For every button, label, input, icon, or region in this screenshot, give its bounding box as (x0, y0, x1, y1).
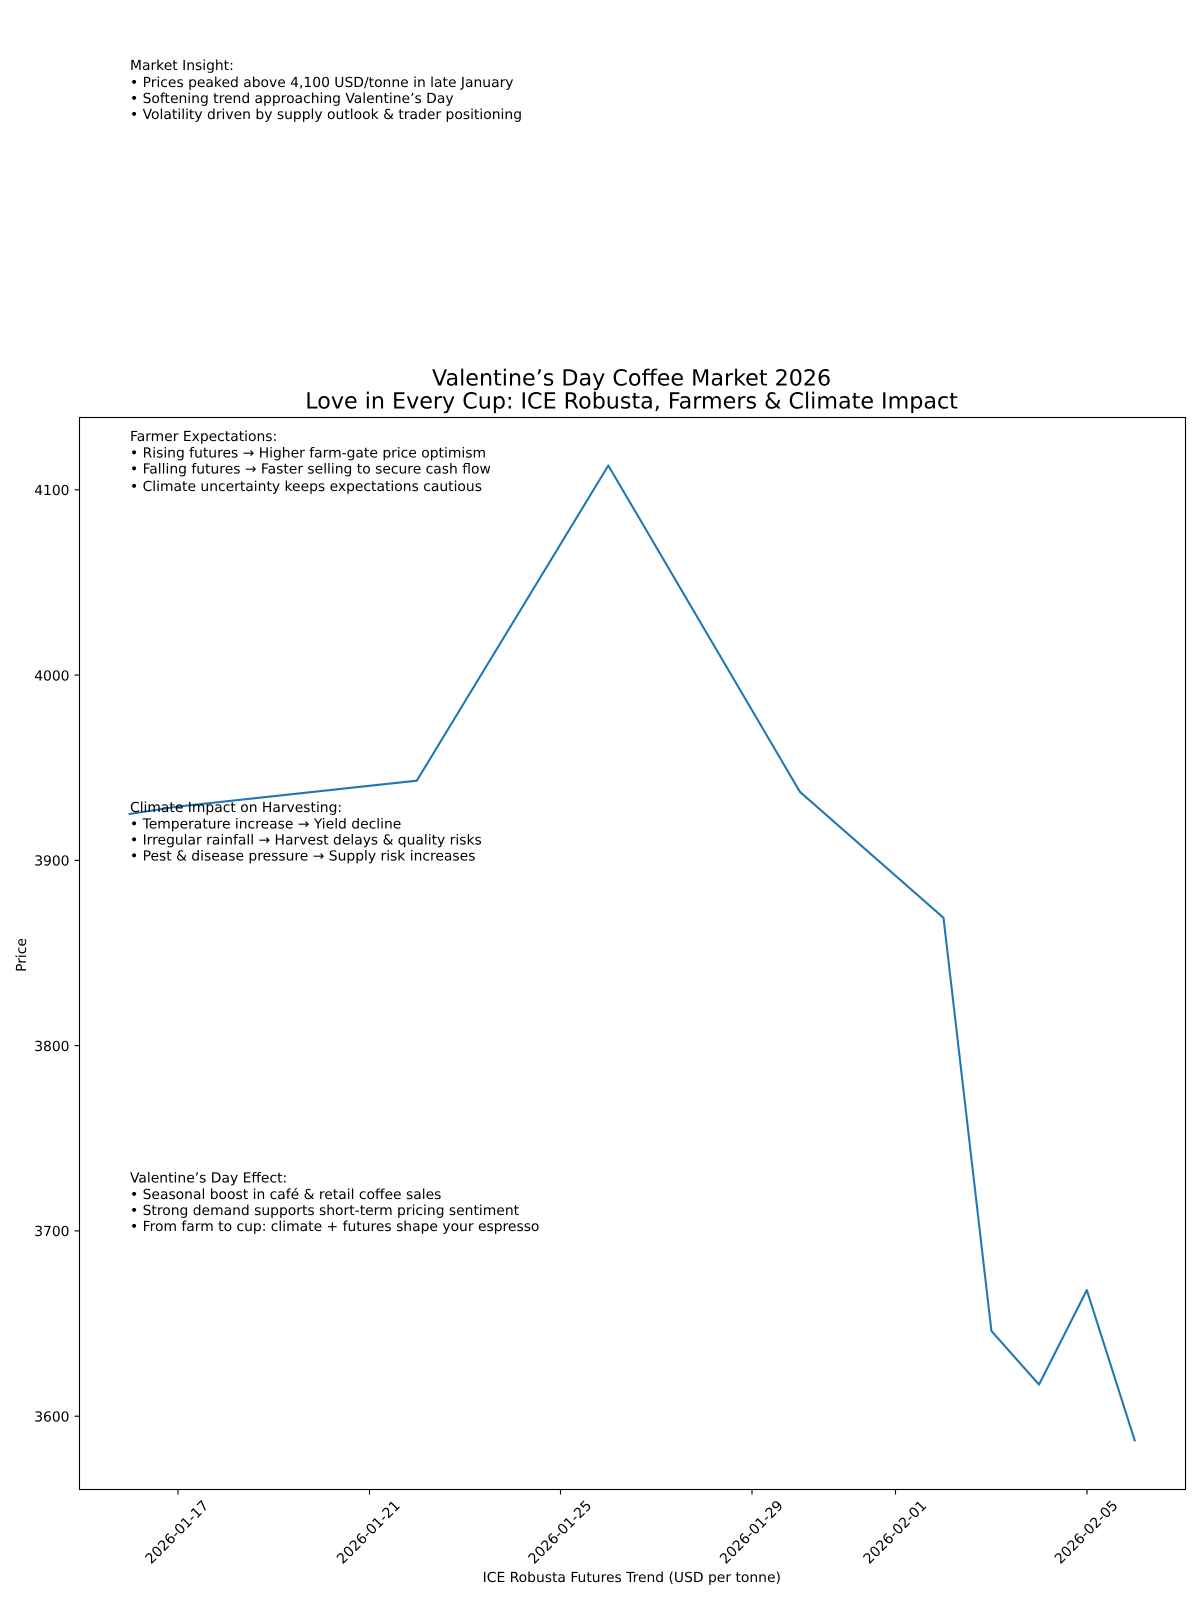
text block: market insight: • Prices peaked above 4,100 USD/tonne in late January (130, 75, 514, 91)
y axis labels: 3800 (34, 1039, 70, 1055)
x axis title: ICE Robusta Futures Trend (USD per tonne) (483, 1570, 781, 1586)
text block: farmer expectations: • Rising futures → Higher farm-gate price optimism (130, 446, 486, 462)
text block: climate impact on harvesting: • Temperature increase → Yield decline (130, 816, 401, 832)
x axis labels: 2026-01-17 (143, 1498, 212, 1568)
text block: climate impact on harvesting (130, 800, 482, 864)
text block: climate impact on harvesting: Climate Impact on Harvesting: (130, 800, 342, 816)
y axis labels: 3900 (34, 854, 70, 870)
text block: market insight: • Softening trend approaching Valentine’s Day (130, 91, 454, 107)
text block: market insight (130, 58, 522, 123)
y axis labels: 3600 (34, 1410, 70, 1426)
y axis labels (34, 483, 70, 1426)
x axis labels: 2026-02-05 (1052, 1498, 1122, 1568)
y axis labels: 4100 (34, 483, 70, 499)
plot frame (80, 418, 1186, 1490)
x axis labels: 2026-01-25 (526, 1498, 595, 1568)
y axis labels: 4000 (34, 668, 70, 684)
title: Valentine’s Day Coffee Market 2026 (432, 366, 831, 392)
line chart: ICE Robusta futures trend (14, 418, 1186, 1586)
text block: valentine's day effect: • Strong demand supports short-term pricing sentiment (130, 1203, 520, 1219)
text block: farmer expectations (130, 429, 491, 495)
text block: climate impact on harvesting: • Pest & disease pressure → Supply risk increases (130, 848, 475, 864)
text block: farmer expectations: • Climate uncertainty keeps expectations cautious (130, 479, 482, 495)
y axis ticks (75, 490, 80, 1416)
title: Love in Every Cup: ICE Robusta, Farmers & Climate Impact (305, 388, 958, 414)
text block: climate impact on harvesting: • Irregular rainfall → Harvest delays & quality risks (130, 832, 482, 848)
x axis labels: 2026-01-29 (717, 1498, 787, 1568)
title (305, 366, 958, 414)
x axis labels: 2026-02-01 (861, 1498, 930, 1568)
text block: market insight: Market Insight: (130, 58, 234, 74)
text block: valentine's day effect (130, 1170, 539, 1235)
x axis ticks (178, 1490, 1087, 1494)
y axis title: Price (14, 938, 30, 972)
text block: valentine's day effect: • From farm to cup: climate + futures shape your espresso (130, 1219, 539, 1235)
text block: market insight: • Volatility driven by supply outlook & trader positioning (130, 107, 522, 123)
text block: valentine's day effect: Valentine’s Day Effect: (130, 1170, 287, 1186)
text block: farmer expectations: Farmer Expectations: (130, 429, 277, 445)
price line (130, 466, 1135, 1440)
x axis labels (143, 1498, 1122, 1568)
text block: farmer expectations: • Falling futures → Faster selling to secure cash flow (130, 462, 491, 478)
x axis labels: 2026-01-21 (334, 1498, 404, 1568)
y axis labels: 3700 (34, 1224, 70, 1240)
text block: valentine's day effect: • Seasonal boost in café & retail coffee sales (130, 1187, 441, 1203)
